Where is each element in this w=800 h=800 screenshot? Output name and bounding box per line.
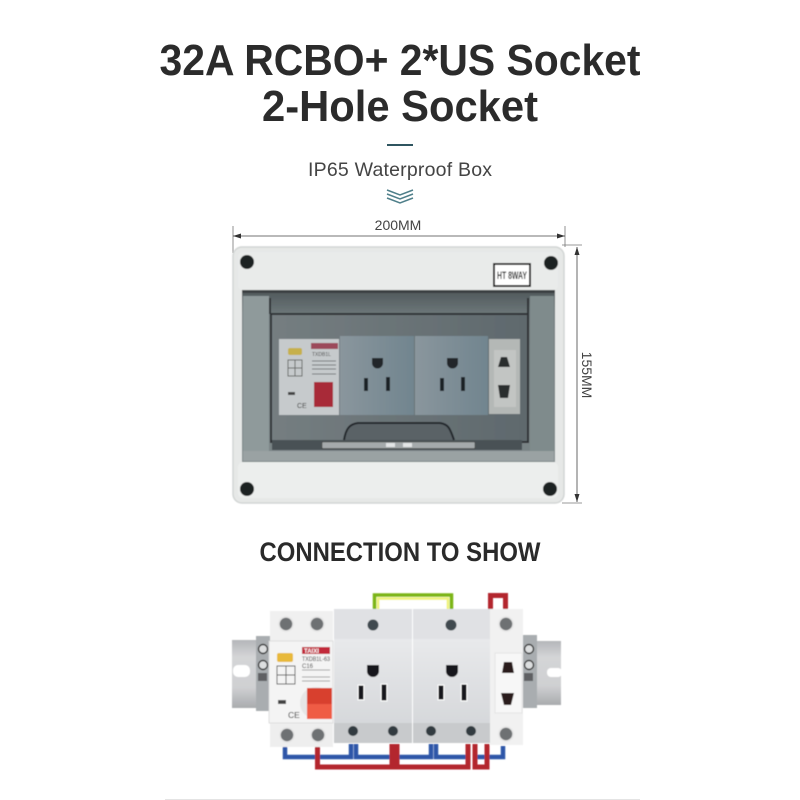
module top band [334, 609, 412, 639]
US socket 1 in box [340, 336, 414, 415]
top screw [368, 620, 378, 630]
front body [269, 641, 333, 723]
RCBO circuit diagram [288, 360, 302, 376]
socket plate [340, 336, 414, 415]
red top jumper [490, 596, 506, 609]
title: 32A RCBO+ 2*US Socket [160, 36, 641, 85]
bottom screw [499, 727, 513, 741]
circuit diagram [277, 666, 295, 684]
inner panel lower band [272, 440, 522, 450]
screw bottom right [543, 482, 557, 496]
US socket 2 in box [415, 336, 488, 415]
RCBO breaker in box [279, 339, 339, 415]
box lower lid [238, 462, 558, 498]
terminal screws bottom [280, 728, 325, 742]
rail body [530, 641, 561, 705]
rail slot [547, 668, 562, 677]
RCBO indicator [288, 392, 295, 395]
rail slot [233, 665, 250, 677]
RCBO module [269, 611, 333, 747]
module bottom band [413, 723, 490, 743]
bottom rule [165, 799, 640, 800]
RCBO brand tag [311, 343, 338, 349]
box upper lid highlight [238, 252, 558, 290]
top terminal block [270, 611, 333, 643]
screw top right [544, 256, 558, 270]
ground hole [372, 358, 383, 368]
brand tag: TAIXI [304, 649, 319, 655]
socket plate [489, 339, 520, 414]
module face [413, 639, 490, 723]
green earth wire [374, 595, 452, 609]
red live wires [318, 744, 487, 767]
red switch [307, 688, 332, 719]
screw bottom left [240, 482, 254, 496]
model text: TXDB1L-63 [302, 657, 331, 663]
socket plate [495, 653, 522, 713]
module body [413, 609, 490, 743]
module body [334, 609, 412, 743]
accent divider [387, 144, 413, 146]
ground hole [367, 665, 379, 677]
clamp screw upper [258, 644, 268, 654]
rail clamp [256, 636, 270, 711]
connection diagram [232, 595, 562, 767]
ground hole [447, 358, 458, 368]
RCBO yellow test button [288, 348, 302, 355]
subtitle: IP65 Waterproof Box [308, 159, 492, 181]
blades [358, 685, 364, 700]
rating lines [302, 670, 330, 681]
switch recess [300, 687, 332, 719]
din rail right [523, 635, 562, 708]
rail body [232, 640, 262, 708]
title [160, 36, 641, 131]
clamp screw lower [524, 660, 534, 670]
2-hole socket module [490, 609, 523, 745]
clamp screw lower [258, 660, 268, 670]
bottom terminal block [270, 722, 333, 747]
din rail left [232, 636, 270, 711]
clamp latch [524, 673, 533, 681]
window left frame [243, 296, 269, 452]
height dimension: 155MM [562, 245, 595, 503]
latch bar [322, 442, 475, 448]
title: 2-Hole Socket [262, 82, 538, 131]
window bottom strip [243, 451, 554, 461]
RCBO CE mark: CE [297, 403, 307, 410]
blue neutral wires [285, 744, 503, 757]
rating text: C16 [302, 664, 314, 670]
width dimension: 200MM: 200MM [375, 217, 421, 233]
top screw [446, 620, 456, 630]
US socket module 2 [413, 609, 490, 743]
module top band [413, 609, 490, 639]
latch clips [386, 443, 412, 447]
module face [334, 639, 412, 723]
clamp screw upper [524, 644, 534, 654]
label: HT 8WAY [494, 264, 530, 286]
waterproof box [233, 247, 564, 503]
blades [364, 377, 390, 391]
carry handle [344, 423, 454, 440]
2-hole socket in box [489, 339, 520, 414]
bottom screws [426, 726, 436, 736]
yellow test button [277, 653, 293, 662]
clamp latch [258, 673, 267, 681]
section heading: CONNECTION TO SHOW [260, 537, 541, 567]
icon: double chevron [387, 190, 413, 203]
module bottom band [334, 723, 412, 743]
bottom screws [348, 726, 358, 736]
window top shadow [242, 290, 555, 293]
indicator [278, 700, 286, 704]
RCBO rating lines [312, 361, 336, 374]
RCBO model text: TXDB1L [312, 352, 331, 358]
blades [440, 377, 465, 391]
top screw [499, 617, 513, 631]
lower hole [498, 385, 510, 398]
inner dark panel [271, 314, 528, 442]
RCBO red switch [314, 382, 333, 407]
label: HT 8WAY: HT 8WAY [497, 270, 527, 282]
window right frame [530, 296, 554, 452]
module body [490, 609, 523, 745]
width dimension: 200MM [233, 217, 565, 253]
lower hole [501, 693, 514, 705]
US socket module 1 [334, 609, 412, 743]
inner frame posts [270, 298, 528, 314]
socket inner plate [494, 350, 516, 407]
height dimension: 155MM: 155MM [579, 352, 595, 398]
CE mark: CE [288, 710, 300, 720]
terminal screws top [279, 617, 324, 631]
transparent window [242, 290, 555, 462]
socket plate [415, 336, 488, 415]
RCBO body [279, 339, 339, 415]
ground hole [446, 665, 458, 677]
rail clamp [523, 635, 537, 708]
upper hole [498, 357, 510, 367]
upper hole [502, 662, 514, 673]
blades [438, 685, 444, 700]
screw top left [240, 255, 254, 269]
box enclosure [233, 247, 564, 503]
